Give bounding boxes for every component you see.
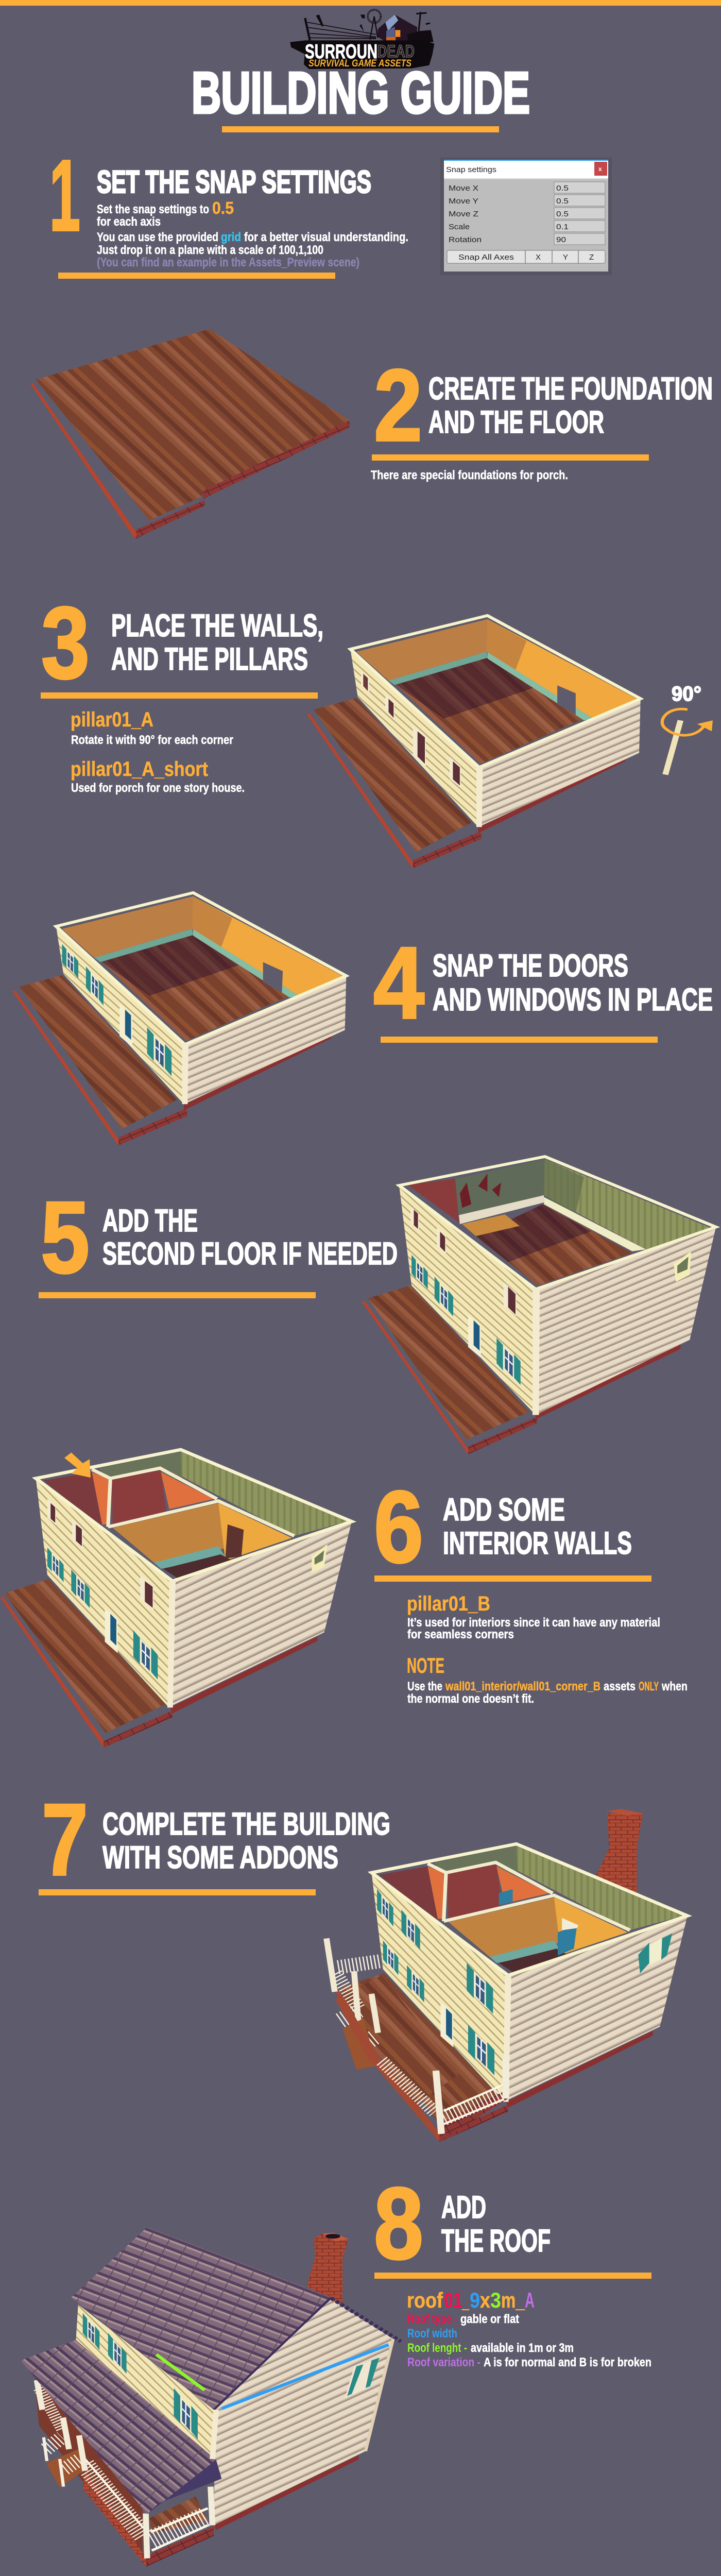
step 7 heading xyxy=(102,1806,390,1875)
step 6 house with interior walls xyxy=(0,1450,352,1748)
panel: snap settings window: Snap All Axes xyxy=(458,253,514,262)
title: BUILDING GUIDE xyxy=(192,60,530,125)
step 3 heading xyxy=(111,608,323,676)
step 6 heading xyxy=(443,1492,632,1561)
roof asset naming legend: 9 xyxy=(470,2288,480,2312)
step 6 notes: Use the xyxy=(407,1680,442,1693)
roof length marker xyxy=(157,2354,204,2390)
step 5 two storey house xyxy=(362,1157,716,1454)
step 3 number: 3 xyxy=(41,586,90,700)
panel: snap settings window: Move Y xyxy=(449,197,478,206)
step 3 house shell xyxy=(307,616,641,868)
panel: snap settings window: Move Z xyxy=(449,210,478,218)
step 6 heading: ADD SOME xyxy=(443,1492,565,1527)
panel: snap settings window: Y xyxy=(563,253,568,262)
panel: snap settings window: Rotation xyxy=(449,235,482,244)
step 5 heading: ADD THE xyxy=(102,1203,198,1238)
roof asset naming legend: m_ xyxy=(501,2288,525,2312)
step 2 number: 2 xyxy=(374,348,422,462)
step 7 underline xyxy=(39,1889,316,1895)
step 7 heading: COMPLETE THE BUILDING xyxy=(102,1806,390,1841)
step 6 notes: when xyxy=(661,1680,688,1693)
step 3 notes: Used for porch for one story house. xyxy=(71,781,245,795)
step 4 underline xyxy=(381,1037,658,1043)
step 8 heading: THE ROOF xyxy=(441,2223,551,2258)
title underline xyxy=(222,126,499,132)
panel: snap settings window xyxy=(440,158,612,275)
step 8 house with roof xyxy=(21,2227,401,2567)
step 2 underline xyxy=(372,454,649,461)
step 1 underline xyxy=(58,273,335,279)
panel: snap settings window: Z xyxy=(589,253,594,262)
top orange band xyxy=(0,0,721,6)
step 3 heading: PLACE THE WALLS, xyxy=(111,608,323,643)
step 6 notes xyxy=(407,1592,688,1706)
roof asset naming legend: roof xyxy=(407,2288,443,2312)
panel: snap settings window: 0.5 xyxy=(556,210,569,218)
roof asset naming legend: A xyxy=(525,2288,535,2312)
panel: snap settings window: 0.5 xyxy=(556,197,569,206)
step 7 number: 7 xyxy=(42,1783,88,1896)
roof asset naming legend: x xyxy=(480,2288,491,2312)
step 6 number: 6 xyxy=(374,1470,423,1584)
step 3 notes xyxy=(71,708,245,795)
roof asset naming legend: 3 xyxy=(490,2288,501,2312)
panel: snap settings window: 0.5 xyxy=(556,184,569,193)
roof width marker xyxy=(221,2345,388,2409)
step 7 heading: WITH SOME ADDONS xyxy=(102,1840,338,1875)
step 1 text block: (You can find an example in the Assets_Preview scene) xyxy=(97,256,359,269)
panel: snap settings window: x xyxy=(598,165,602,173)
step 3 pillar rotate icon: 90° xyxy=(672,683,701,705)
panel: snap settings window: Scale xyxy=(449,223,470,231)
logo wordmark: DEAD xyxy=(377,42,415,61)
step 6 notes: for seamless corners xyxy=(407,1628,514,1641)
step 1 text block: for a better visual understanding. xyxy=(244,230,408,244)
step 1 text block xyxy=(97,198,408,269)
step 4 heading xyxy=(433,948,713,1017)
step 8 heading: ADD xyxy=(441,2190,486,2225)
step 6 notes: pillar01_B xyxy=(407,1592,490,1615)
step 7 house with addons xyxy=(327,1809,688,2142)
panel: snap settings window: 90 xyxy=(556,235,566,244)
step 2 heading xyxy=(428,371,713,439)
roof asset naming legend: gable or flat xyxy=(460,2312,519,2326)
step 1 number: 1 xyxy=(49,139,80,252)
roof asset naming legend: _ xyxy=(461,2288,469,2312)
step 2 heading: AND THE FLOOR xyxy=(428,404,604,439)
step 1 text block: 0.5 xyxy=(212,198,234,217)
logo wordmark: SURVIVAL GAME ASSETS xyxy=(308,58,411,69)
step 6 notes: the normal one doesn’t fit. xyxy=(407,1692,534,1706)
roof asset naming legend: Roof type - xyxy=(407,2312,457,2326)
panel: snap settings window: X xyxy=(536,253,541,262)
icon: arrow to interior pillar xyxy=(64,1452,91,1478)
step 3 notes: pillar01_A_short xyxy=(71,758,208,781)
step 2 text: There are special foundations for porch. xyxy=(371,468,568,482)
roof asset naming legend: A is for normal and B is for broken xyxy=(484,2355,651,2369)
step 8 underline xyxy=(374,2273,651,2279)
step 6 notes: ONLY xyxy=(639,1680,659,1693)
step 5 number: 5 xyxy=(41,1180,90,1294)
step 1 heading: SET THE SNAP SETTINGS xyxy=(97,164,371,199)
step 1 text block: grid xyxy=(221,230,241,244)
step 5 underline xyxy=(39,1292,316,1298)
logo: Surroundead xyxy=(290,10,434,69)
panel: snap settings window: Move X xyxy=(449,184,478,193)
step 4 heading: SNAP THE DOORS xyxy=(433,948,628,983)
step 6 notes: assets xyxy=(604,1680,636,1693)
panel: snap settings window: Snap settings xyxy=(446,165,496,174)
step 6 heading: INTERIOR WALLS xyxy=(443,1526,632,1561)
roof asset naming legend xyxy=(407,2288,651,2369)
roof asset naming legend: Roof lenght - xyxy=(407,2341,467,2355)
step 3 notes: pillar01_A xyxy=(71,708,153,731)
panel: snap settings window: 0.1 xyxy=(556,223,569,231)
step 1 text block: for each axis xyxy=(97,215,161,229)
logo wordmark: SURROUN xyxy=(305,41,377,63)
step 8 number: 8 xyxy=(374,2166,423,2280)
step 3 underline xyxy=(41,692,318,699)
roof asset naming legend: Roof variation - xyxy=(407,2355,480,2369)
step 1 text block: Just drop it on a plane with a scale of 100,1,100 xyxy=(97,243,323,257)
step 6 notes: wall01_interior/wall01_corner_B xyxy=(445,1680,600,1693)
step 8 heading xyxy=(441,2190,551,2258)
step 6 notes: NOTE xyxy=(407,1653,444,1677)
step 3 pillar rotate icon xyxy=(662,683,713,775)
step 4 house with doors and windows xyxy=(12,893,346,1145)
step 6 notes: It’s used for interiors since it can have any material xyxy=(407,1616,660,1630)
step 4 number: 4 xyxy=(373,926,424,1040)
roof asset naming legend: Roof width xyxy=(407,2327,457,2341)
step 2 floor illustration xyxy=(30,329,350,538)
step 6 underline xyxy=(374,1575,651,1582)
step 3 notes: Rotate it with 90° for each corner xyxy=(71,733,233,747)
roof asset naming legend: 01 xyxy=(444,2288,462,2312)
step 1 text block: You can use the provided xyxy=(97,230,218,244)
step 1 text block: Set the snap settings to xyxy=(97,202,209,216)
step 5 heading xyxy=(102,1203,398,1271)
roof asset naming legend: available in 1m or 3m xyxy=(471,2341,574,2355)
step 3 heading: AND THE PILLARS xyxy=(111,641,308,676)
step 5 heading: SECOND FLOOR IF NEEDED xyxy=(102,1236,398,1271)
